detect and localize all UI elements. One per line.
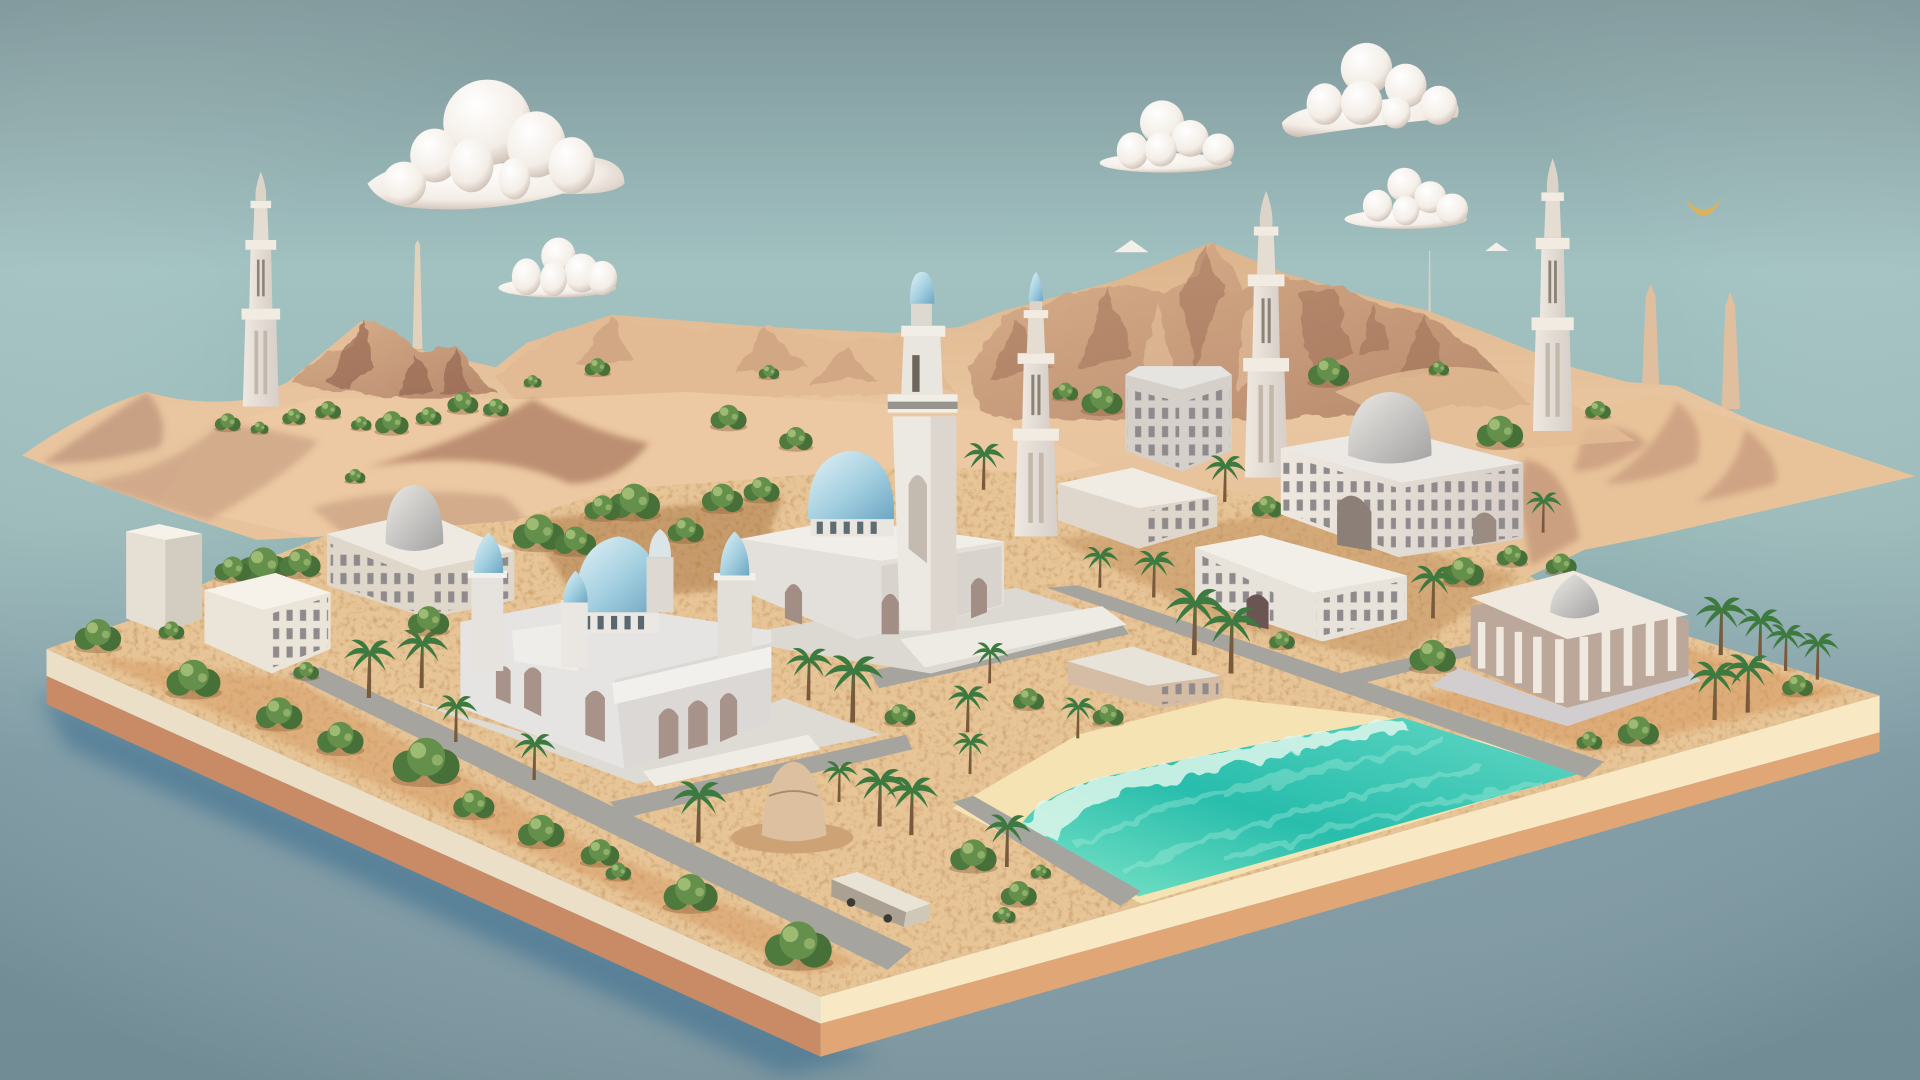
building: central mosque xyxy=(722,272,1127,673)
mid buildings xyxy=(126,191,1577,673)
rock mountain right xyxy=(967,242,1531,422)
building: rear block xyxy=(1125,366,1232,471)
beach xyxy=(953,698,1592,904)
icon: domed hut xyxy=(731,762,853,853)
thin distant towers xyxy=(413,240,1740,409)
central portal xyxy=(512,622,578,671)
rock mountain left xyxy=(288,318,496,402)
dune: left lower shadows xyxy=(86,422,318,520)
dune: big centre shadow xyxy=(365,399,649,484)
mosque body xyxy=(741,520,1004,639)
platform shadow xyxy=(37,692,882,1075)
cloud: centre right xyxy=(1100,100,1234,173)
dune: right ripples xyxy=(1573,402,1776,502)
platform: top ground xyxy=(47,465,1880,997)
dome xyxy=(575,536,661,633)
cloud: lower right xyxy=(1344,168,1468,229)
palms xyxy=(344,547,1839,867)
water body xyxy=(1022,718,1580,896)
minaret: right of block xyxy=(1243,191,1289,478)
platform: left orange layer xyxy=(47,676,820,1057)
building: right mid long block xyxy=(1195,535,1407,642)
road: toward beach right xyxy=(1047,585,1604,778)
icon: crescent moon xyxy=(1685,196,1723,216)
platform: right cream layer xyxy=(820,696,1880,1024)
cloud: small left xyxy=(498,238,617,298)
front wing top xyxy=(612,647,771,704)
road: long left diagonal xyxy=(288,667,912,970)
mosque dome xyxy=(808,451,894,536)
water xyxy=(1022,718,1580,896)
desert plateau xyxy=(22,158,1915,582)
rear sandy hills xyxy=(496,316,955,404)
road: mid crossing xyxy=(869,622,1129,688)
base platform xyxy=(47,465,1880,1057)
wave bands xyxy=(1078,742,1543,872)
mosque arches xyxy=(785,578,987,634)
plaza xyxy=(404,698,882,784)
platform: left cream layer xyxy=(47,649,820,1024)
clouds xyxy=(367,43,1509,298)
sand base xyxy=(22,242,1915,582)
minaret: distant right two xyxy=(1722,291,1740,409)
side towers xyxy=(468,529,756,671)
dune: right base tone xyxy=(1530,475,1914,576)
platform: right orange layer xyxy=(820,732,1880,1057)
building: low centre xyxy=(1058,468,1217,549)
mosque main minaret xyxy=(888,272,958,631)
minaret: centre rear xyxy=(1013,272,1059,536)
cloud: distant small xyxy=(1114,240,1509,252)
road: to right xyxy=(1329,643,1488,686)
cloud: top right xyxy=(1282,43,1459,137)
road: beside water xyxy=(953,796,1141,906)
foam fringe xyxy=(1022,718,1408,845)
minaret: distant right one xyxy=(1642,284,1659,386)
road: front centre xyxy=(610,735,912,818)
building: domed right hall xyxy=(1281,392,1523,557)
roads xyxy=(288,585,1604,970)
building: left low xyxy=(204,573,331,673)
building: front mosque xyxy=(404,529,882,786)
trees behind centre xyxy=(214,443,1577,588)
ground patches xyxy=(86,496,1849,973)
dune: lower centre shadow xyxy=(314,490,524,532)
building: left white tower xyxy=(126,524,202,633)
foreground palms and shrubs xyxy=(74,547,1839,971)
antenna xyxy=(1428,251,1431,318)
building: left domed hall xyxy=(327,485,514,618)
cloud: large left xyxy=(367,80,624,210)
dune shading xyxy=(43,367,1915,582)
building: small low beach pavilion xyxy=(1068,647,1221,708)
body xyxy=(460,600,771,769)
minaret: far left xyxy=(242,171,280,407)
mosque plaza xyxy=(722,588,1127,673)
dune: right shadow large xyxy=(1518,459,1580,566)
dune: far left shadow xyxy=(43,392,163,463)
dune: rear right xyxy=(1335,367,1635,453)
lit dune field xyxy=(314,392,994,537)
building: colonnaded temple xyxy=(1431,571,1701,726)
desert vegetation xyxy=(214,358,1611,484)
minaret: thin antenna xyxy=(413,240,422,349)
minaret: far right xyxy=(1532,158,1574,431)
arches xyxy=(496,666,737,759)
shrubs xyxy=(74,606,1814,971)
front steps xyxy=(643,735,820,786)
plaza steps xyxy=(900,606,1127,667)
icon: truck xyxy=(831,872,931,927)
